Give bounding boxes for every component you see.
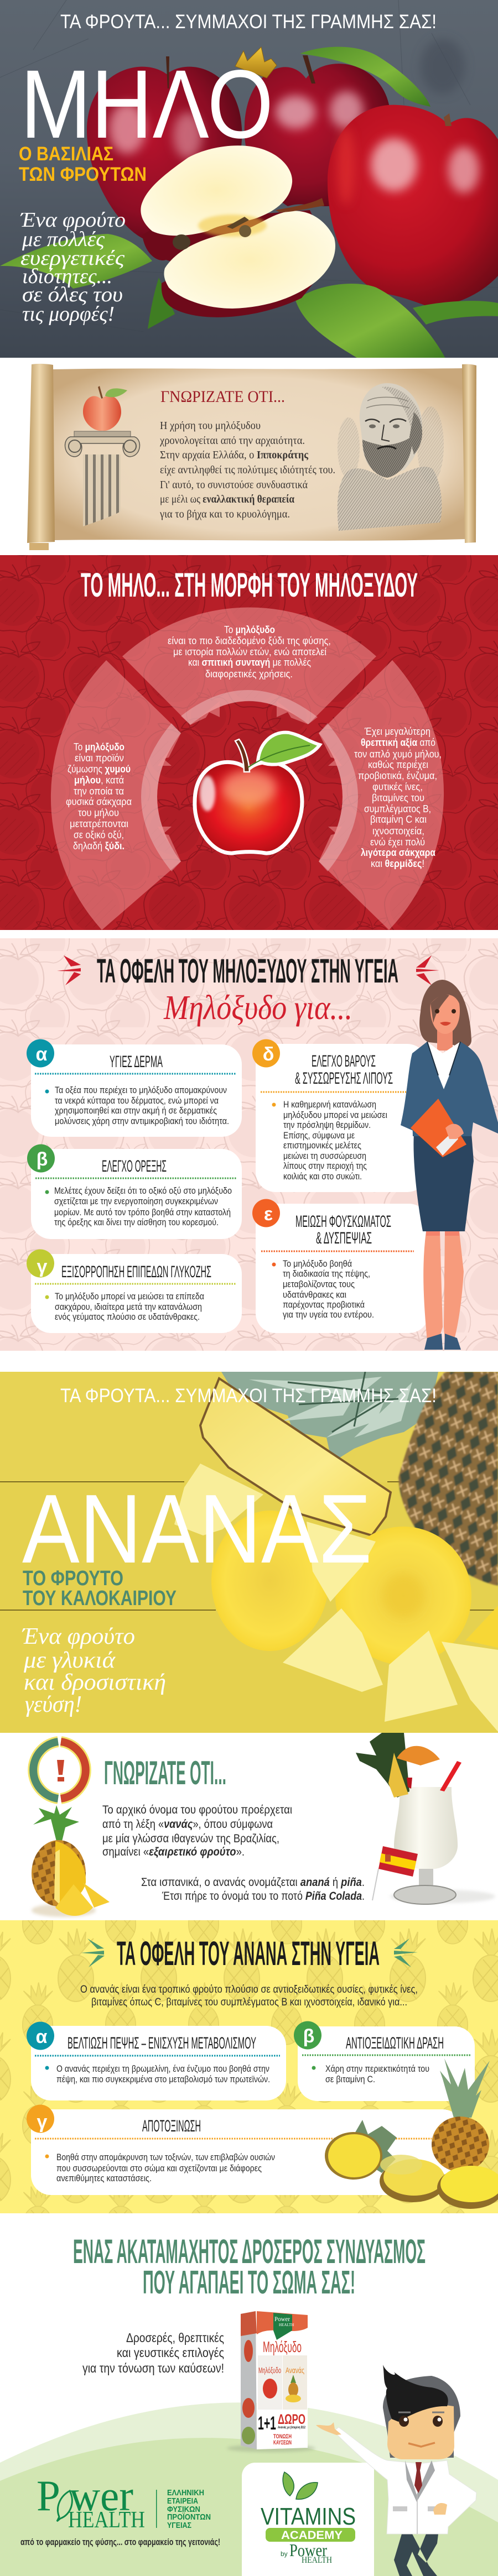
panel: pineapple hero: [0, 1372, 498, 1733]
card: bloating and dyspepsia: [252, 1199, 429, 1333]
text block: right sector: βιταμίνη C και: [370, 813, 427, 825]
card: appetite control: [27, 1145, 242, 1239]
icon: green rays left: [81, 1938, 105, 1967]
panel: apple hero: [0, 0, 498, 359]
text block: intro: [80, 1984, 418, 2008]
folder: [411, 1099, 466, 1157]
card text: επιστημονικές μελέτες: [283, 1141, 361, 1151]
card text: μεταβολίζοντας τους: [283, 1279, 355, 1289]
logo: by power health: by: [281, 2550, 288, 2558]
card text: λίπους στην περιοχή της: [283, 1161, 367, 1171]
text block: pina colada: Έτσι πήρε το όνομά του το ποτό Piña Colada.: [162, 1890, 365, 1903]
text block: hippocrates paragraph: με μέλι ως εναλλακτική θεραπεία: [160, 493, 294, 505]
heading: series title: ΤΑ ΦΡΟΥΤΑ... ΣΥΜΜΑΧΟΙ ΤΗΣ ΓΡΑΜΜΗΣ ΣΑΣ!: [60, 11, 437, 33]
card text: Ο ανανάς περιέχει τη βρωμελίνη, ένα ένζυμο που βοηθά στην: [56, 2064, 269, 2074]
sector: right: [319, 660, 444, 930]
product box: Μηλόξυδο: [263, 2338, 302, 2355]
text block: right sector: Έχει μεγαλύτερη: [364, 725, 430, 737]
text block: top sector: με ιστορία πολλών ετών, ενώ αποτελεί: [173, 646, 326, 657]
text: handwritten vinegar for: Μηλόξυδο για...: [163, 989, 352, 1027]
text block: name origin: [102, 1804, 292, 1858]
icon: apple on column: [65, 386, 139, 526]
text: tagline: από το φαρμακείο της φύσης... στο φαρμακείο της γειτονιάς!: [20, 2537, 220, 2547]
card text: Βοηθά στην απομάκρυνση των τοξινών, των επιβλαβών ουσιών: [56, 2152, 275, 2162]
card text: υδατάνθρακες και: [283, 1290, 346, 1300]
text block: handwritten tagline: Ένα φρούτο: [20, 208, 126, 232]
icon: leaves: [283, 2472, 318, 2499]
text block: handwritten tagline: [22, 1624, 166, 1717]
panel: vinegar health benefits: [0, 938, 498, 1351]
subtitle: king of fruits: Ο ΒΑΣΙΛΙΑΣ: [19, 143, 113, 165]
icon: gamma badge: γ: [37, 2112, 48, 2133]
text block: name origin: από τη λέξη «νανάς», όπου σύμφωνα: [102, 1818, 273, 1831]
card: glucose balance: ΕΞΙΣΟΡΡΟΠΗΣΗ ΕΠΙΠΕΔΩΝ ΓΛΥΚΟΖΗΣ: [61, 1263, 211, 1281]
text block: left sector: δηλαδή ξύδι.: [73, 840, 124, 852]
card: vitamins academy: [242, 2463, 374, 2576]
heading: did you know: ΓΝΩΡΙΖΑΤΕ ΟΤΙ...: [160, 388, 285, 406]
card text: μηλόξυδου μπορεί να μειώσει: [283, 1110, 387, 1120]
panel: pineapple did you know: [32, 1733, 495, 1917]
photo: pineapple spear: [200, 1378, 391, 1535]
text block: handwritten tagline: [20, 208, 126, 326]
photo: right apple: [328, 105, 498, 306]
text block: name origin: Το αρχικό όνομα του φρούτου προέρχεται: [102, 1804, 292, 1816]
logo: power health: ΕΤΑΙΡΕΙΑ: [167, 2496, 198, 2506]
text block: handwritten tagline: με πολλές: [22, 228, 105, 251]
hand right: [433, 2503, 447, 2515]
text block: left sector: του μήλου: [78, 807, 119, 818]
text block: refreshing options: Δροσερές, θρεπτικές: [126, 2331, 224, 2345]
card: glucose balance: [27, 1250, 242, 1333]
logo: power health: P wer: [37, 2472, 133, 2520]
title: apple: ΜΗΛΟ: [20, 50, 273, 159]
logo: power health: ΦΥΣΙΚΩΝ: [167, 2505, 200, 2514]
card text: μολύνσεις χάρη στην αντιμικροβιακή του ιδιότητα.: [55, 1116, 229, 1126]
text block: handwritten tagline: ευεργετικές: [20, 247, 125, 270]
icon: beta badge: β: [303, 2026, 314, 2047]
icon: spanish flag: [372, 1846, 418, 1900]
card: healthy skin: ΥΓΙΕΣ ΔΕΡΜΑ: [110, 1053, 163, 1071]
card: appetite control: ΕΛΕΓΧΟ ΟΡΕΞΗΣ: [102, 1157, 167, 1175]
text block: hippocrates paragraph: χρονολογείται από την αρχαιότητα.: [159, 435, 305, 447]
photo: pineapple with slices: [325, 2058, 498, 2209]
text block: right sector: φυτικές ίνες,: [372, 781, 423, 792]
text block: left sector: την οποία τα: [74, 785, 124, 797]
card text: σακχάρου, ιδιαίτερα μετά την κατανάλωση: [55, 1302, 202, 1312]
icon: central red apple: [195, 733, 320, 853]
card text: ενός γεύματος πλούσιο σε υδατάνθρακες.: [55, 1312, 200, 1322]
text block: handwritten tagline: με γλυκιά: [23, 1648, 116, 1673]
product box: ΔΩΡΟ: [278, 2412, 305, 2427]
logo: power health: [37, 2472, 211, 2533]
card text: σε βιταμίνη C.: [325, 2075, 375, 2084]
card: detoxification: [27, 2104, 463, 2195]
icon: exclamation ring: [33, 1742, 86, 1799]
icon: beta badge: [294, 2021, 321, 2049]
scroll left roller: [27, 364, 55, 550]
text block: top sector: και σπιτική συνταγή με πολλές: [188, 656, 311, 668]
text block: refreshing options: για την τόνωση των καύσεων!: [82, 2361, 224, 2375]
icon: epsilon badge: [252, 1199, 280, 1227]
icon: halved pineapple: [32, 1805, 110, 1917]
panel: pineapple did you know: ΓΝΩΡΙΖΑΤΕ ΟΤΙ...: [104, 1754, 226, 1791]
text block: right sector: συμπλέγματος Β,: [364, 803, 431, 814]
photo: left apple: [87, 56, 242, 242]
text block: hippocrates paragraph: Η χρήση του μηλόξυδου: [160, 420, 261, 432]
title: pineapple: ΑΝΑΝΑΣ: [22, 1474, 372, 1584]
text block: handwritten tagline: ιδιότητες...: [22, 265, 112, 288]
text block: right sector: καθώς περιέχει: [368, 759, 428, 770]
card text: Χάρη στην περιεκτικότητά του: [325, 2064, 429, 2074]
lapels and tie: [405, 2460, 435, 2502]
card title: [295, 1213, 391, 1247]
card text: την πρόσληψη θερμίδων.: [283, 1120, 371, 1130]
card text: τα νεκρά κύτταρα του δέρματος, ενώ μπορεί να: [55, 1096, 219, 1106]
card: digestion and metabolism: [27, 2021, 286, 2100]
icon: gamma badge: [27, 2104, 54, 2133]
illustration: businesswoman: [401, 980, 498, 1350]
text block: refreshing options: [82, 2331, 224, 2375]
panel: scroll did you know: [27, 364, 476, 550]
card text: που συσσωρεύονται στο σώμα και σχετίζονται με διάφορες: [56, 2164, 262, 2173]
icon: green rays right: [394, 1938, 418, 1967]
icon: alpha badge: α: [36, 1044, 48, 1065]
icon: beta badge: β: [37, 1149, 48, 1170]
illustration: doctor: [316, 2365, 476, 2576]
subtitle: king of fruits: ΤΩΝ ΦΡΟΥΤΩΝ: [19, 164, 147, 185]
text block: hippocrates paragraph: Στην αρχαία Ελλάδα, ο Ιπποκράτης: [160, 449, 309, 461]
photo: lower right leaf: [295, 284, 446, 359]
card text: για την υγεία του εντέρου.: [283, 1310, 374, 1320]
text block: right sector: ιχνοστοιχεία,: [372, 825, 424, 837]
product box: Ανανάς με βιταμίνη B12: [278, 2426, 305, 2429]
card: weight control: [252, 1039, 427, 1192]
sector: left: [51, 660, 181, 930]
card text: [283, 1100, 387, 1182]
panel: product closing: [0, 2213, 498, 2576]
text block: intro: βιταμίνες όπως C, βιταμίνες του συμπλέγματος Β και ιχνοστοιχεία, ιδανικό για...: [91, 1997, 407, 2008]
logo: by power health: Pοwer: [289, 2540, 327, 2560]
text block: left sector: είναι προϊόν: [75, 752, 124, 764]
text block: handwritten tagline: και δροσιστική: [24, 1670, 166, 1695]
light green hill: [0, 2402, 498, 2576]
text block: top sector: είναι το πιο διαδεδομένο ξύδι της φύσης,: [168, 635, 331, 646]
text block: right sector: θρεπτική αξία από: [361, 736, 435, 749]
text block: left sector: Το μηλόξυδο: [74, 741, 124, 753]
icon: gamma badge: γ: [37, 1256, 48, 1277]
icon: beta badge: [27, 1145, 55, 1172]
card text: παρέχοντας προβιοτικά: [283, 1300, 365, 1310]
card: bloating and dyspepsia: ΜΕΙΩΣΗ ΦΟΥΣΚΩΜΑΤΟΣ: [295, 1213, 391, 1231]
card text: ανεπιθύμητες καταστάσεις.: [56, 2173, 152, 2183]
card text: Το μηλόξυδο βοηθά: [283, 1259, 352, 1269]
hand: [445, 1124, 464, 1139]
product box: ΤΟΝΩΣΗ: [273, 2433, 292, 2440]
logo: power health: ΠΡΟΪΟΝΤΩΝ: [167, 2512, 211, 2522]
product box: Power: [274, 2315, 290, 2323]
text block: left sector: φυσικά σάκχαρα: [66, 796, 132, 807]
text block: name origin: με μία γλώσσα ιθαγενών της Βραζιλίας,: [102, 1832, 279, 1845]
card text: μειώνει τη συσσώρευση: [283, 1151, 366, 1161]
product box: HEALTH: [279, 2323, 294, 2327]
card: antioxidant action: [294, 2021, 475, 2101]
photo: far right leaf: [413, 301, 498, 325]
text block: hippocrates paragraph: Γι' αυτό, το συνιστούσε συνδυαστικά: [160, 479, 308, 491]
icon: red rays right: [416, 955, 439, 985]
photo: ring slice right: [335, 1527, 471, 1665]
text block: hippocrates paragraph: [159, 420, 335, 520]
logo: power health: ΕΛΛΗΝΙΚΗ: [167, 2488, 204, 2497]
hair back: [419, 980, 471, 1048]
text block: right sector: [354, 725, 442, 869]
subtitle: king of fruits: [19, 147, 146, 181]
hand left: [316, 2422, 341, 2435]
shoes: [424, 1334, 461, 1350]
subtitle: fruit of summer: [23, 1570, 176, 1606]
text block: pina colada: Στα ισπανικά, ο ανανάς ονομάζεται ananá ή piña.: [141, 1876, 365, 1889]
text block: handwritten tagline: τις μορφές!: [22, 302, 115, 326]
subtitle: fruit of summer: ΤΟΥ ΚΑΛΟΚΑΙΡΙΟΥ: [23, 1587, 177, 1610]
panel: apple cider vinegar: [0, 555, 498, 930]
coat: [334, 2427, 476, 2534]
card text: Το μηλόξυδο μπορεί να μειώσει τα επίπεδα: [55, 1292, 204, 1302]
heading: series title: ΤΑ ΦΡΟΥΤΑ... ΣΥΜΜΑΧΟΙ ΤΗΣ ΓΡΑΜΜΗΣ ΣΑΣ!: [60, 1385, 437, 1407]
icon: alpha badge: [27, 2021, 54, 2050]
eyes: [399, 2416, 409, 2427]
photo: top leaf: [300, 47, 430, 107]
badge: academy: ACADEMY: [281, 2529, 343, 2542]
card title: ΕΛΕΓΧΟ ΒΑΡΟΥΣ: [312, 1052, 376, 1070]
photo: left leaf: [0, 234, 152, 289]
card: digestion and metabolism: ΒΕΛΤΙΩΣΗ ΠΕΨΗΣ – ΕΝΙΣΧΥΣΗ ΜΕΤΑΒΟΛΙΣΜΟΥ: [68, 2034, 256, 2052]
subtitle: fruit of summer: ΤΟ ΦΡΟΥΤΟ: [23, 1567, 123, 1590]
text block: handwritten tagline: γεύση!: [25, 1692, 82, 1717]
badge: academy: [266, 2528, 355, 2542]
card: weight control: & ΣΥΣΣΩΡΕΥΣΗΣ ΛΙΠΟΥΣ: [295, 1069, 393, 1088]
card text: πέψη, και πιο συγκεκριμένα στο μεταβολισμό των πρωτεϊνών.: [56, 2075, 270, 2084]
photo: small lower leaf: [148, 278, 175, 329]
text block: right sector: λιγότερα σάκχαρα: [361, 847, 436, 858]
product box: Ανανάς: [286, 2366, 304, 2375]
card text: μορίων. Με αυτό τον τρόπο βοηθά στην καταστολή: [54, 1208, 231, 1218]
card: healthy skin: [27, 1039, 242, 1137]
text block: left sector: ζύμωσης χυμού: [68, 763, 131, 775]
text block: right sector: βιταμίνες του: [372, 792, 424, 803]
heading: irresistible combination: [73, 2233, 426, 2301]
icon: gamma badge: [27, 1250, 54, 1277]
photo: ring slice left: [211, 1511, 329, 1651]
card text: [54, 1186, 232, 1227]
logo: power health: ΥΓΕΙΑΣ: [167, 2521, 191, 2530]
photo: wedge upper left: [174, 1464, 263, 1535]
card text: Τα οξέα που περιέχει το μηλόξυδο απομακρύνουν: [55, 1085, 227, 1095]
text block: left sector: [66, 741, 132, 852]
text block: right sector: προβιοτικά, ένζυμα,: [358, 770, 437, 781]
icon: pina colada glass: [356, 1733, 495, 1904]
text block: handwritten tagline: Ένα φρούτο: [22, 1624, 135, 1649]
text block: refreshing options: και γευστικές επιλογές: [117, 2345, 224, 2360]
card text: [56, 2152, 275, 2183]
scroll right roller: [462, 364, 476, 543]
card text: χρησιμοποιηθεί και στην ακμή ή σε δερματικές: [55, 1106, 217, 1116]
text block: hippocrates paragraph: για το βήχα και το κρυολόγημα.: [159, 508, 290, 520]
text block: left sector: μετατρέπονται: [70, 818, 128, 829]
icon: red rays left: [57, 955, 81, 985]
icon: crown: [235, 47, 277, 78]
text block: right sector: τον απλό χυμό μήλου,: [354, 748, 442, 760]
text block: handwritten tagline: σε όλες του: [22, 283, 123, 306]
illustration: hippocrates bust: [338, 383, 444, 531]
text block: right sector: ενώ έχει πολύ: [370, 836, 425, 848]
card text: [325, 2064, 429, 2084]
icon: alpha badge: α: [36, 2026, 48, 2047]
card text: τη διαδικασία της πέψης,: [283, 1269, 370, 1279]
card text: Επίσης, σύμφωνα με: [283, 1131, 355, 1141]
card text: [55, 1292, 204, 1322]
product box: ΚΑΥΣΕΩΝ: [273, 2439, 292, 2446]
icon: delta badge: δ: [263, 1044, 274, 1065]
green hill: [0, 2438, 498, 2576]
legs: [423, 1231, 464, 1341]
logo: power health: HEALTH: [68, 2507, 145, 2533]
skirt: [413, 1133, 474, 1231]
text: vitamins: VITAMINS: [261, 2503, 356, 2530]
card text: [55, 1085, 229, 1126]
card title: [295, 1052, 393, 1088]
panel: pineapple health benefits: [0, 1920, 498, 2213]
mouth: [408, 2443, 435, 2447]
scroll paper: [53, 368, 466, 541]
text block: intro: Ο ανανάς είναι ένα τροπικό φρούτο πλούσιο σε αντιοξειδωτικές ουσίες, φυτικές ίνες,: [80, 1984, 418, 1995]
text block: top sector: Το μηλόξυδο: [224, 624, 275, 636]
text block: left sector: μήλου, κατά: [74, 774, 124, 786]
photo: pineapple crown: [221, 1372, 438, 1462]
card text: Μελέτες έχουν δείξει ότι το οξικό οξύ στο μηλόξυδο: [54, 1186, 232, 1196]
photo: wedges lower: [283, 1522, 498, 1732]
photo: whole pineapple: [398, 1372, 498, 1586]
card title: & ΔΥΣΠΕΨΙΑΣ: [316, 1229, 372, 1247]
card text: [283, 1259, 374, 1320]
card text: σχετίζεται με την ενεργοποίηση συγκεκριμένων: [54, 1196, 218, 1206]
neck and face: [437, 1028, 453, 1051]
head: [383, 2376, 460, 2458]
text block: hippocrates paragraph: είχε αντιληφθεί τις πολύτιμες ιδιότητές του.: [160, 464, 335, 476]
icon: alpha badge: [27, 1039, 54, 1067]
card: detoxification: ΑΠΟΤΟΞΙΝΩΣΗ: [142, 2117, 201, 2135]
photo: cut apple half: [141, 145, 335, 317]
sector: top: [122, 608, 376, 725]
card text: της όρεξης και δίνει την αίσθηση του κορεσμού.: [54, 1218, 219, 1227]
text block: name origin: σημαίνει «εξαιρετικό φρούτο».: [102, 1846, 245, 1858]
jacket: [401, 1042, 498, 1136]
text block: pina colada: [141, 1876, 365, 1903]
text block: top sector: [168, 624, 331, 680]
logo: by power health: [281, 2540, 332, 2565]
legs: [394, 2534, 438, 2576]
logo: by power health: HEALTH: [302, 2556, 332, 2565]
icon: delta badge: [252, 1039, 280, 1067]
photo: middle apple: [245, 55, 391, 206]
product box: [227, 2311, 315, 2452]
text block: right sector: και θερμίδες!: [371, 858, 424, 869]
text block: top sector: διαφορετικές χρήσεις.: [205, 668, 293, 680]
card text: Η καθημερινή κατανάλωση: [283, 1100, 376, 1110]
icon: epsilon badge: ε: [264, 1204, 273, 1225]
card text: κοιλιάς και στο συκώτι.: [283, 1172, 362, 1182]
card text: [56, 2064, 270, 2084]
product box: 1+1: [258, 2413, 276, 2434]
product box: Μηλόξυδο: [258, 2366, 281, 2375]
text block: left sector: σε οξικό οξύ,: [74, 829, 124, 840]
